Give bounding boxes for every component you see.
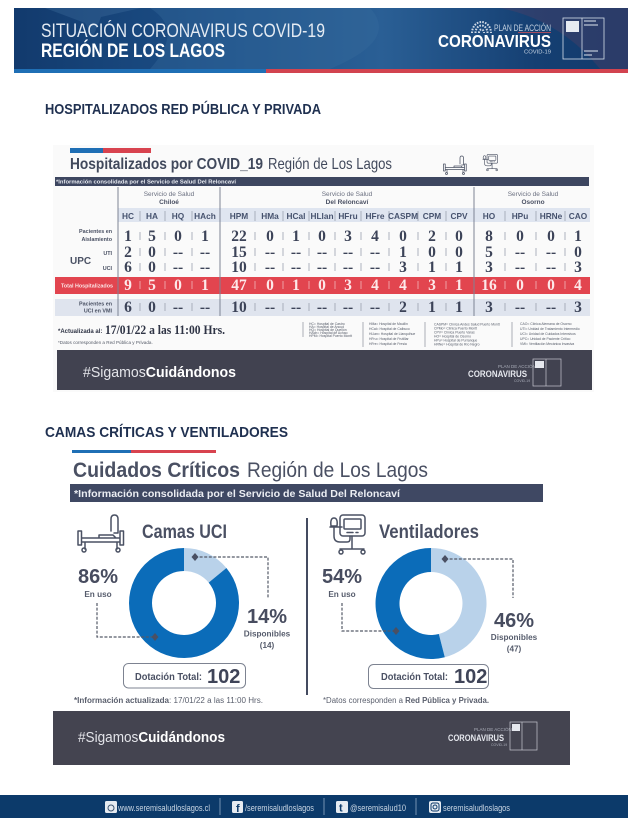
legend of abbreviations: HMa= Hospital de Maullín <box>369 322 408 326</box>
row: UTI: -- <box>173 244 183 261</box>
row: aislamiento: 1 <box>574 228 582 245</box>
callout: 14% disponibles: 14% <box>247 606 287 628</box>
header logo: plan de acción coronavirus <box>438 22 551 56</box>
legend of abbreviations: UPC= Unidad de Paciente Crítico <box>520 337 571 341</box>
donut chart: ventiladores <box>376 548 487 659</box>
legend of abbreviations: UCI= Unidad de Cuidados Intensivos <box>520 332 576 336</box>
update date: *Datos corresponden a Red Pública y Privada. <box>58 340 153 345</box>
row: UTI: 0 <box>148 244 156 261</box>
row: UTI: -- <box>265 244 275 261</box>
column headers <box>122 211 588 221</box>
callout: 86% en uso: En uso <box>84 590 112 599</box>
dotación total: ventiladores: Dotación Total: <box>381 672 448 683</box>
row: UCI: -- <box>173 259 183 276</box>
callout: 54% en uso: En uso <box>328 590 356 599</box>
logo: coronavirus: COVID-19 <box>514 379 530 383</box>
row: UTI: 0 <box>574 244 582 261</box>
row: UTI: -- <box>515 244 525 261</box>
service headings: Servicio de Salud <box>144 191 195 198</box>
row: total hospitalizados: 1 <box>201 277 209 294</box>
row: total hospitalizados: 4 <box>574 277 582 294</box>
row: UCI: 10 <box>231 259 247 276</box>
row: aislamiento: 4 <box>371 228 379 245</box>
header title: SITUACIÓN CORONAVIRUS COVID-19 <box>41 20 325 42</box>
legend of abbreviations: CAO= Clínica Alemana de Osorno <box>520 322 572 326</box>
row: VMI: -- <box>265 299 275 316</box>
callout: 54% en uso <box>322 566 400 635</box>
icon: ventilator <box>330 515 365 554</box>
logo: coronavirus <box>448 722 537 750</box>
callout: 46% disponibles: (47) <box>507 644 522 654</box>
row: UTI: -- <box>200 244 210 261</box>
row: UCI: 6 <box>124 259 132 276</box>
legend of abbreviations: HFre= Hospital de Fresia <box>369 342 407 346</box>
footer band: sigamos cuidándonos: #SigamosCuidándonos <box>78 729 225 746</box>
row: UCI: 3 <box>485 259 493 276</box>
header banner <box>14 8 628 73</box>
row: UTI: -- <box>370 244 380 261</box>
row: UCI <box>124 259 582 276</box>
row: total hospitalizados <box>124 277 582 294</box>
row: UCI: -- <box>546 259 556 276</box>
table title: Región de Los Lagos <box>268 156 392 173</box>
row: UCI: -- <box>291 259 301 276</box>
column headers: HCal <box>287 211 305 221</box>
row: VMI: 3 <box>485 299 493 316</box>
row: UTI: 0 <box>428 244 436 261</box>
column headers: CAO <box>569 211 588 221</box>
divider <box>306 518 308 695</box>
heading: ventiladores: Ventiladores <box>379 522 479 543</box>
logo: coronavirus: PLAN DE ACCIÓN <box>498 363 536 369</box>
legend of abbreviations: CASPM= Clínica Andes Salud Puerto Montt <box>434 322 500 326</box>
legend of abbreviations: HCal= Hospital de Calbuco <box>369 327 410 331</box>
label: total hospitalizados: Total Hospitalizados <box>61 284 113 290</box>
donut chart: camas UCI <box>129 548 239 658</box>
link: tumblr: @seremisalud10 <box>350 803 406 813</box>
logo: coronavirus: CORONAVIRUS <box>448 733 504 744</box>
callout: 86% en uso: 86% <box>78 566 118 588</box>
note: datos red pública y privada: *Datos corresponden a Red Pública y Privada. <box>323 696 489 705</box>
accent bar <box>72 450 216 453</box>
callout: 46% disponibles <box>442 555 538 654</box>
info bar: *Información consolidada por el Servicio de Salud Del Reloncaví <box>56 180 237 186</box>
header emblem: ministerio de salud <box>563 18 604 59</box>
column header band <box>118 208 590 222</box>
row: VMI: 0 <box>148 299 156 316</box>
info bar <box>55 177 589 186</box>
column headers: HO <box>483 211 496 221</box>
row: UCI: 0 <box>148 259 156 276</box>
legend of abbreviations <box>303 322 580 347</box>
row: total hospitalizados: 16 <box>481 277 497 294</box>
callout: 14% disponibles <box>192 553 291 650</box>
footer band: sigamos cuidándonos <box>57 350 592 390</box>
column headers: HQ <box>172 211 185 221</box>
row: aislamiento <box>124 228 582 245</box>
row: VMI <box>124 299 582 316</box>
legend of abbreviations: VMI= Ventilación Mecánica Invasiva <box>520 342 574 346</box>
note: información actualizada: *Información actualizada: 17/01/22 a las 11:00 Hrs. <box>74 696 263 705</box>
row: VMI: 6 <box>124 299 132 316</box>
callout: 86% en uso <box>78 566 158 641</box>
service headings: Servicio de Salud <box>508 191 559 198</box>
column headers: HC <box>122 211 134 221</box>
icon: bed <box>444 156 466 174</box>
row: total hospitalizados: 0 <box>318 277 326 294</box>
panel title: Cuidados Críticos <box>73 459 240 482</box>
service headings: Chiloé <box>159 199 179 206</box>
vmi row band <box>55 299 590 316</box>
row: UCI: 3 <box>574 259 582 276</box>
header logo: plan de acción coronavirus: PLAN DE ACCIÓN <box>494 23 551 33</box>
callout: 14% disponibles: (14) <box>260 641 275 650</box>
header logo: plan de acción coronavirus: CORONAVIRUS <box>438 31 551 51</box>
link: tumblr <box>336 801 406 814</box>
logo: coronavirus: CORONAVIRUS <box>468 369 527 380</box>
panel title: Región de Los Lagos <box>247 459 428 482</box>
legend of abbreviations: CPMo= Clínica Puerto Montt <box>434 326 477 330</box>
column headers: HPu <box>512 211 528 221</box>
row labels: UCI en VMI <box>84 308 112 314</box>
table title <box>70 156 392 173</box>
dotación total: ventiladores: 102 <box>454 666 487 688</box>
footer band: sigamos cuidándonos: #SigamosCuidándonos <box>83 364 236 381</box>
row labels: Pacientes en <box>79 302 112 308</box>
column headers: CPM <box>423 211 441 221</box>
row: VMI: 10 <box>231 299 247 316</box>
row: VMI: -- <box>343 299 353 316</box>
row: VMI: -- <box>200 299 210 316</box>
dotación total: ventiladores <box>368 664 488 688</box>
logo: coronavirus: PLAN DE ACCIÓN <box>474 726 512 732</box>
row: UCI: -- <box>265 259 275 276</box>
row: aislamiento: 3 <box>344 228 352 245</box>
row: UTI: 5 <box>485 244 493 261</box>
callout: 46% disponibles: 46% <box>494 610 534 632</box>
row: UTI: 2 <box>124 244 132 261</box>
accent bar <box>70 148 151 153</box>
row: total hospitalizados: 0 <box>547 277 555 294</box>
row: aislamiento: 2 <box>428 228 436 245</box>
row: VMI: -- <box>317 299 327 316</box>
dotación total: camas: 102 <box>207 666 240 688</box>
row labels: Aislamiento <box>81 237 113 243</box>
row: VMI: 1 <box>455 299 463 316</box>
row: aislamiento: 5 <box>148 228 156 245</box>
row labels: UTI <box>103 251 112 257</box>
row: UTI: -- <box>343 244 353 261</box>
column headers: HPM <box>230 211 248 221</box>
column headers: HFre <box>366 211 385 221</box>
legend of abbreviations: HFru= Hospital de Frutillar <box>369 337 410 341</box>
row: UTI: -- <box>546 244 556 261</box>
row: aislamiento: 0 <box>174 228 182 245</box>
row: total hospitalizados: 0 <box>516 277 524 294</box>
row: total hospitalizados: 4 <box>399 277 407 294</box>
header title: REGIÓN DE LOS LAGOS <box>41 40 225 62</box>
column headers: HA <box>146 211 158 221</box>
footer bar: social links <box>0 795 628 818</box>
row: VMI: 2 <box>399 299 407 316</box>
row labels: UCI <box>103 266 112 272</box>
link: tumblr: t <box>339 802 343 814</box>
link: website: www.seremisaludloslagos.cl <box>117 803 210 813</box>
legend of abbreviations: HO= Hospital de Osorno <box>434 334 471 338</box>
info bar <box>70 484 543 502</box>
row: total hospitalizados: 3 <box>428 277 436 294</box>
column headers: HLlan <box>310 211 334 221</box>
panel: hospitalizados table <box>53 145 594 392</box>
label: UPC: UPC <box>70 256 91 267</box>
icon: bed <box>78 515 124 552</box>
row: UTI: -- <box>317 244 327 261</box>
legend of abbreviations: HQ= Hospital de Quellón <box>309 328 347 332</box>
link: instagram: seremisaludloslagos <box>443 803 510 813</box>
row: VMI: 1 <box>428 299 436 316</box>
total row separators <box>140 281 565 289</box>
legend of abbreviations: HAch= Hospital de Achao <box>309 331 348 335</box>
header title <box>41 20 325 62</box>
heading: camas UCI: Camas UCI <box>142 522 227 543</box>
row: total hospitalizados: 3 <box>344 277 352 294</box>
row: UTI: -- <box>291 244 301 261</box>
row: UTI: 0 <box>455 244 463 261</box>
legend of abbreviations: UTI= Unidad de Tratamiento Intermedio <box>520 327 580 331</box>
legend of abbreviations: HPu= Hospital de Purranque <box>434 338 477 342</box>
row: total hospitalizados: 4 <box>371 277 379 294</box>
logo: coronavirus: COVID-19 <box>491 743 507 747</box>
callout: 46% disponibles: Disponibles <box>491 633 538 642</box>
column headers: CPV <box>450 211 468 221</box>
row: VMI: -- <box>173 299 183 316</box>
row: total hospitalizados: 0 <box>266 277 274 294</box>
icon: ventilator <box>483 154 498 171</box>
row: total hospitalizados: 1 <box>292 277 300 294</box>
row: aislamiento: 0 <box>399 228 407 245</box>
cell separators <box>140 211 565 311</box>
row: aislamiento: 1 <box>124 228 132 245</box>
row: aislamiento: 0 <box>547 228 555 245</box>
update date <box>58 323 225 345</box>
legend of abbreviations: HA= Hospital de Ancud <box>309 325 344 329</box>
legend of abbreviations: HRNe= Hospital de Río Negro <box>434 342 480 346</box>
column headers: HFru <box>338 211 358 221</box>
panel: cuidados críticos <box>53 450 570 765</box>
footer band: sigamos cuidándonos <box>53 711 570 765</box>
row: total hospitalizados: 47 <box>231 277 247 294</box>
row: aislamiento: 8 <box>485 228 493 245</box>
link: facebook: /seremisaludloslagos <box>245 803 314 813</box>
table title: Hospitalizados por COVID_19 <box>70 156 263 173</box>
update date: *Actualizada al: <box>58 329 102 335</box>
legend of abbreviations: HPM= Hospital Puerto Montt <box>309 334 352 338</box>
row: VMI: -- <box>291 299 301 316</box>
row: UCI: -- <box>343 259 353 276</box>
row: UCI: 3 <box>399 259 407 276</box>
row: aislamiento: 1 <box>292 228 300 245</box>
row: total hospitalizados: 0 <box>174 277 182 294</box>
row: UCI: -- <box>370 259 380 276</box>
column headers: HAch <box>194 211 216 221</box>
row: total hospitalizados: 9 <box>124 277 132 294</box>
row: UTI: 1 <box>399 244 407 261</box>
service headings: Del Reloncaví <box>326 199 369 206</box>
legend of abbreviations: HC= Hospital de Castro <box>309 322 345 326</box>
row: UCI: -- <box>200 259 210 276</box>
row: VMI: 3 <box>574 299 582 316</box>
callout: 14% disponibles: Disponibles <box>244 630 291 638</box>
row labels: Pacientes en <box>79 229 112 235</box>
service headings: Osorno <box>521 199 545 206</box>
column headers: HMa <box>261 211 279 221</box>
link: facebook: f <box>236 803 240 815</box>
row: VMI: -- <box>370 299 380 316</box>
row: aislamiento: 0 <box>516 228 524 245</box>
link: facebook <box>232 801 314 815</box>
row: aislamiento: 0 <box>455 228 463 245</box>
total row band <box>55 277 590 294</box>
header logo: plan de acción coronavirus: COVID-19 <box>524 50 551 56</box>
row: total hospitalizados: 1 <box>455 277 463 294</box>
row: VMI: -- <box>515 299 525 316</box>
row: UTI <box>124 244 582 261</box>
row: aislamiento: 1 <box>201 228 209 245</box>
column headers: CASPM <box>388 211 418 221</box>
row labels <box>79 229 113 314</box>
legend of abbreviations: CPV= Clínica Puerto Varas <box>434 330 475 334</box>
row: UCI: 1 <box>428 259 436 276</box>
heading: hospitalizados: HOSPITALIZADOS RED PÚBLICA Y PRIVADA <box>45 100 321 118</box>
row: UCI: -- <box>515 259 525 276</box>
column dividers <box>118 187 474 316</box>
dotación total: camas: Dotación Total: <box>135 672 202 683</box>
row: aislamiento: 0 <box>318 228 326 245</box>
update date: 17/01/22 a las 11:00 Hrs. <box>105 323 225 337</box>
row: UCI: -- <box>317 259 327 276</box>
row: aislamiento: 22 <box>231 228 247 245</box>
row: aislamiento: 0 <box>266 228 274 245</box>
column headers: HRNe <box>540 211 563 221</box>
info bar: *Información consolidada por el Servicio de Salud Del Reloncaví <box>74 489 401 500</box>
row: total hospitalizados: 5 <box>148 277 156 294</box>
service headings: Servicio de Salud <box>322 191 373 198</box>
legend of abbreviations: HLlan= Hospital de Llanquihue <box>369 332 415 336</box>
row: UCI: 1 <box>455 259 463 276</box>
dotación total: camas <box>124 664 246 688</box>
row: VMI: -- <box>546 299 556 316</box>
heading: camas críticas: CAMAS CRÍTICAS Y VENTILADORES <box>45 424 288 441</box>
link: instagram <box>429 801 510 813</box>
service headings <box>144 191 559 206</box>
callout: 54% en uso: 54% <box>322 566 362 588</box>
logo: coronavirus <box>468 359 561 386</box>
link: website <box>105 801 210 813</box>
panel title <box>73 459 428 482</box>
row: UTI: 15 <box>231 244 247 261</box>
